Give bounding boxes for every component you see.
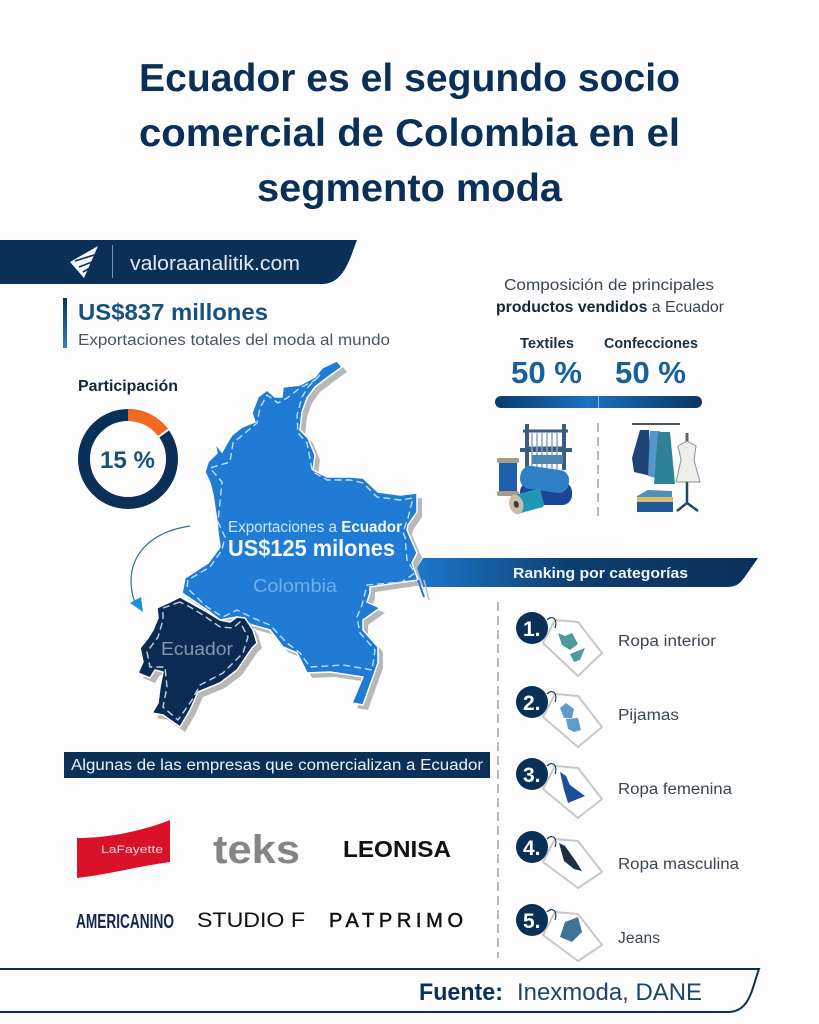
brand banner: valoraanalitik.com	[130, 253, 300, 275]
icon: underwear	[558, 633, 585, 662]
title: comercial de Colombia en el	[139, 112, 680, 155]
title: Ecuador es el segundo socio	[139, 57, 680, 100]
title	[139, 57, 680, 210]
donut chart: participation: Participación	[78, 378, 178, 395]
source footer: Inexmoda, DANE	[517, 979, 702, 1006]
ranking item 1: 1.	[523, 618, 541, 641]
source footer: Fuente:	[419, 979, 503, 1006]
map label: Ecuador: Ecuador	[161, 639, 233, 659]
map shadow Colombia	[187, 366, 423, 710]
composition values: 50 %	[511, 355, 582, 390]
number badge	[516, 831, 548, 863]
tag	[543, 766, 602, 818]
tag	[543, 694, 602, 747]
icon: clothes rack and mannequin	[632, 424, 700, 512]
label: Ropa femenina	[618, 781, 732, 798]
source footer	[0, 969, 759, 1012]
number badge	[516, 758, 548, 790]
ranking header: Ranking por categorías	[513, 565, 688, 582]
logo: Lafayette	[77, 820, 170, 878]
total exports: Exportaciones totales del moda al mundo	[78, 332, 390, 349]
label: Jeans	[618, 930, 660, 947]
ranking item 4	[516, 831, 739, 888]
logo: Studio F: STUDIO F	[197, 909, 305, 932]
map label: value: US$125 milones	[228, 535, 395, 561]
brand banner	[0, 240, 357, 284]
composition heading	[496, 277, 725, 316]
number badge	[516, 904, 548, 936]
composition values: Confecciones	[604, 336, 698, 352]
tag	[543, 620, 602, 676]
icon: brand logo	[70, 246, 98, 278]
ranking item 2	[516, 686, 679, 747]
composition values: Textiles	[520, 336, 574, 352]
label: Pijamas	[618, 707, 679, 724]
Ecuador	[138, 597, 257, 727]
companies heading: Algunas de las empresas que comercializan a Ecuador	[71, 757, 483, 774]
logo: teks: teks	[213, 828, 300, 872]
title: segmento moda	[257, 167, 562, 210]
composition heading: Composición de principales	[504, 277, 714, 294]
tag	[543, 839, 602, 888]
donut chart: participation	[78, 378, 178, 503]
icon: pajamas	[560, 703, 581, 732]
ranking header	[417, 558, 758, 587]
map: Colombia and Ecuador	[138, 361, 429, 732]
map label: Colombia: Colombia	[253, 576, 338, 596]
ranking item 1	[516, 612, 716, 676]
number badge	[516, 686, 548, 718]
ranking item 5: 5.	[523, 910, 541, 933]
label: Ropa masculina	[618, 856, 739, 873]
arrow: to Ecuador	[130, 526, 190, 612]
total exports: US$837 millones	[78, 299, 268, 325]
composition heading: productos vendidos a Ecuador	[496, 299, 725, 316]
ranking item 3	[516, 758, 732, 818]
composition values: 50 %	[615, 355, 686, 390]
map label: exports: Exportaciones a Ecuador	[228, 519, 402, 536]
stitching Ecuador	[147, 602, 248, 720]
companies heading	[64, 752, 490, 778]
total exports	[63, 298, 390, 349]
logo: Leonisa: LEONISA	[343, 836, 451, 862]
tag	[543, 912, 602, 961]
ranking item 4: 4.	[523, 837, 541, 860]
map shadow Ecuador	[143, 602, 262, 732]
icon: jeans	[560, 917, 582, 942]
logo: Patprimo: PATPRIMO	[329, 910, 463, 932]
icon: dress	[560, 772, 585, 803]
logo: Lafayette: LaFayette	[101, 844, 163, 856]
ranking item 5	[516, 904, 660, 961]
composition values	[495, 336, 702, 408]
number badge	[516, 612, 548, 644]
icon: suit	[559, 843, 582, 871]
stitching Colombia	[187, 375, 415, 670]
ranking item 3: 3.	[523, 764, 541, 787]
donut chart: participation: 15 %	[100, 447, 155, 474]
logo: Americanino: AMERICANINO	[76, 911, 174, 933]
icon: textiles loom, thread and fabric	[497, 424, 572, 516]
label: Ropa interior	[618, 633, 716, 650]
Colombia	[182, 361, 418, 705]
ranking item 2: 2.	[523, 692, 541, 715]
